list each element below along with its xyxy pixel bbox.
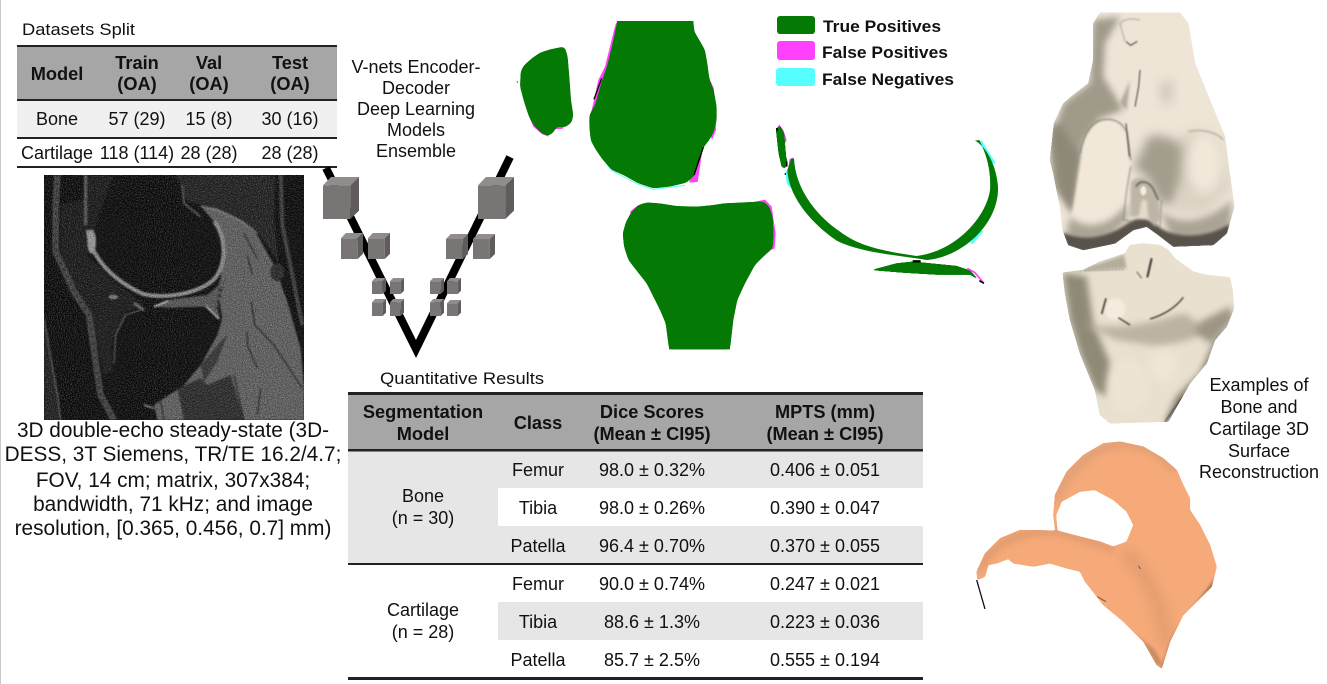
table: quantitative results: 98.0 ± 0.26% [599,498,705,518]
table: datasets split: 30 (16) [261,109,319,129]
table: datasets split: Train [115,53,159,73]
table: quantitative results: 90.0 ± 0.74% [599,574,705,594]
table: quantitative results: (Mean ± CI95) [593,424,711,444]
femur segmentation [589,13,717,189]
table: datasets split: (OA) [189,74,229,94]
table: quantitative results: 0.223 ± 0.036 [770,612,880,632]
table: datasets split: 118 (114) [100,143,174,163]
label: V-nets model ensemble [351,57,481,161]
label: V-nets model ensemble: Deep Learning [357,99,475,119]
table: datasets split: 28 (28) [180,143,238,163]
3D surface: femur [1047,10,1240,253]
table: datasets split: Cartilage [21,143,93,163]
MRI knee scan [44,175,304,420]
table: datasets split: Val [196,53,222,73]
table: quantitative results: (n = 30) [392,508,454,528]
table: datasets split: Model [31,64,83,84]
MRI acquisition caption: DESS, 3T Siemens, TR/TE 16.2/4.7; [5,443,341,466]
label: V-nets model ensemble: V-nets Encoder- [351,57,481,77]
legend: true positives: True Positives [823,18,941,36]
table: quantitative results: 98.0 ± 0.32% [599,460,705,480]
MRI acquisition caption: 3D double-echo steady-state (3D- [17,419,329,442]
legend: true positives [777,16,941,36]
label: 3D surface reconstruction: Reconstruction [1199,462,1319,482]
table: datasets split: 57 (29) [108,109,166,129]
segmentation result: bones [517,13,776,349]
heading: quantitative results: Quantitative Results [380,369,544,388]
table: quantitative results: Segmentation [363,402,483,422]
diagram: V-net encoder-decoder [323,157,514,349]
table: quantitative results: Femur [512,574,564,594]
table: datasets split: 15 (8) [185,109,233,129]
table: quantitative results: Cartilage [387,600,459,620]
MRI acquisition caption: resolution, [0.365, 0.456, 0.7] mm) [15,517,331,540]
legend: false negatives: False Negatives [822,71,954,89]
table: quantitative results: Patella [510,650,567,670]
label: 3D surface reconstruction: Examples of [1209,375,1310,395]
table: datasets split: 28 (28) [261,143,319,163]
segmentation result: cartilage [776,125,998,283]
table: datasets split: (OA) [270,74,310,94]
patella segmentation [517,47,573,137]
heading: datasets split: Datasets Split [22,20,135,39]
MRI acquisition caption: bandwidth, 71 kHz; and image [33,493,313,516]
table: datasets split: Bone [36,109,78,129]
table: datasets split [17,45,337,168]
table: quantitative results: 96.4 ± 0.70% [599,536,705,556]
table: datasets split: Test [272,53,308,73]
page edge line [0,0,1,684]
MRI acquisition caption [5,419,341,540]
table: quantitative results: Dice Scores [600,402,704,422]
table: quantitative results: 0.247 ± 0.021 [770,574,880,594]
table: quantitative results: (n = 28) [392,622,454,642]
legend: false positives [777,41,948,62]
table: quantitative results [348,392,923,680]
legend: false positives: False Positives [822,44,948,62]
label: V-nets model ensemble: Models [387,120,445,140]
table: datasets split: (OA) [117,74,157,94]
table: quantitative results: Patella [510,536,567,556]
label: V-nets model ensemble: Ensemble [376,141,456,161]
table: quantitative results: Bone [402,486,444,506]
tibia segmentation [623,200,776,349]
label: 3D surface reconstruction [1199,375,1319,482]
table: quantitative results: 88.6 ± 1.3% [604,612,700,632]
table: quantitative results: 0.406 ± 0.051 [770,460,880,480]
label: 3D surface reconstruction: Cartilage 3D [1209,419,1309,439]
table: quantitative results: 0.370 ± 0.055 [770,536,880,556]
label: 3D surface reconstruction: Bone and [1220,397,1298,417]
3D surface: tibia [1057,240,1240,427]
table: quantitative results: (Mean ± CI95) [766,424,884,444]
legend [776,16,954,89]
table: quantitative results: 0.555 ± 0.194 [770,650,880,670]
table: quantitative results: 0.390 ± 0.047 [770,498,880,518]
table: quantitative results: Model [397,424,449,444]
table: quantitative results: Femur [512,460,564,480]
table: quantitative results: 85.7 ± 2.5% [604,650,700,670]
legend: false negatives [776,68,954,89]
MRI acquisition caption: FOV, 14 cm; matrix, 307x384; [36,469,310,492]
3D surface: cartilage [973,438,1227,672]
label: V-nets model ensemble: Decoder [382,78,450,98]
table: quantitative results: Tibia [519,498,558,518]
table: quantitative results: Class [514,413,562,433]
label: 3D surface reconstruction: Surface [1228,441,1290,461]
table: quantitative results: MPTS (mm) [775,402,875,422]
table: quantitative results: Tibia [519,612,558,632]
